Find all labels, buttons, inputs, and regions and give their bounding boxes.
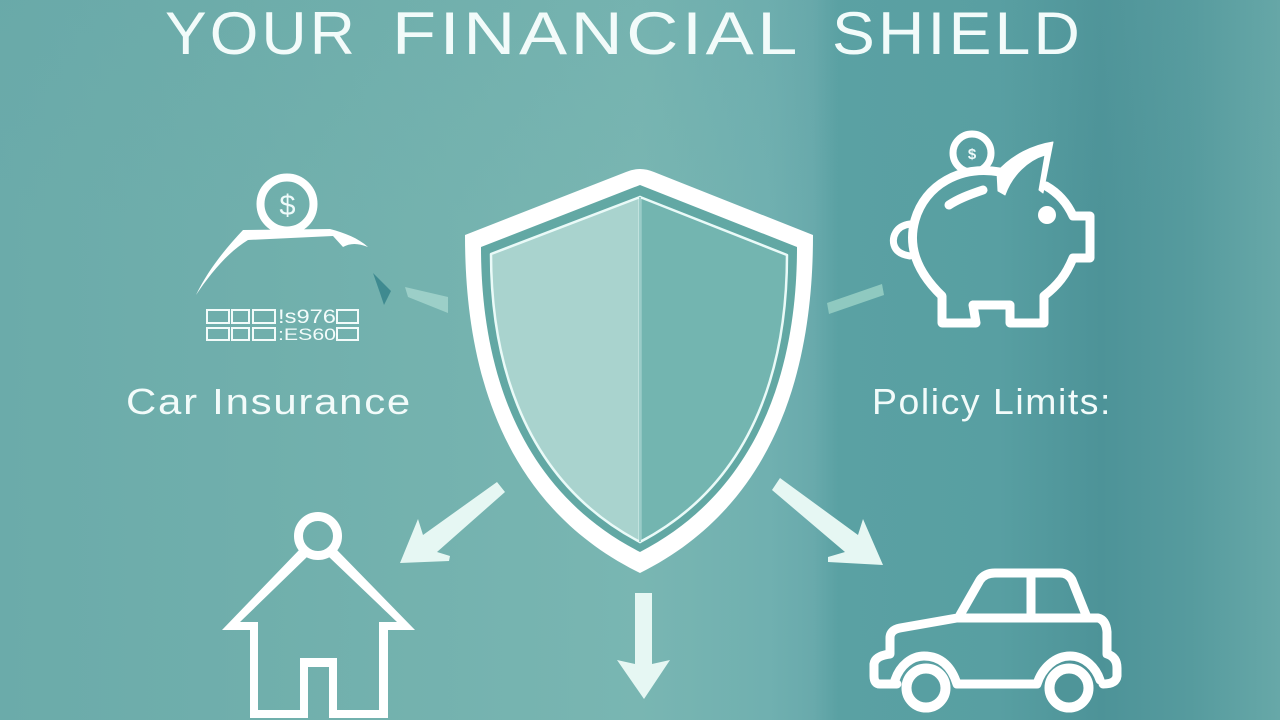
car front wheel (906, 668, 946, 708)
icon: coin and wallet: :ES60 (278, 325, 336, 344)
icon: car (874, 573, 1117, 708)
car window pillar (1026, 574, 1036, 616)
connector: right dash (827, 284, 884, 314)
house outline (222, 549, 415, 718)
shield light left half (491, 197, 640, 542)
arrow: downward (617, 593, 670, 699)
shield darker right half (640, 197, 787, 542)
piggy coin (953, 134, 991, 172)
icon: central shield (465, 169, 813, 573)
shield inner band (481, 185, 797, 552)
piggy body (912, 171, 1090, 323)
title: FINANCIAL (392, 0, 801, 67)
piggy eye (1038, 206, 1056, 224)
connector: left dash (405, 287, 448, 313)
arrow: to house (400, 482, 505, 563)
wallet shadow mark (373, 273, 391, 305)
car rear wheel (1050, 668, 1088, 708)
shield outer rim (465, 169, 813, 573)
wallet outline (196, 229, 368, 295)
car body (874, 618, 1117, 684)
title (165, 0, 1083, 67)
car cabin (960, 573, 1086, 615)
dollar sign: $ (279, 190, 296, 222)
piggy coin symbol: $ (968, 146, 977, 163)
arrow: to car (772, 478, 883, 565)
icon: coin and wallet: !s976 (278, 307, 336, 328)
house top circle (298, 516, 338, 556)
icon: coin and wallet (196, 178, 391, 344)
piggy highlight (949, 190, 983, 205)
icon: piggy bank (893, 134, 1090, 323)
title: SHIELD (832, 0, 1083, 67)
icon: house (222, 516, 415, 718)
garbled code text (207, 310, 358, 340)
label: Policy Limits: Policy Limits: (872, 381, 1112, 422)
piggy ear (997, 142, 1053, 195)
label: Car Insurance: Car Insurance (126, 381, 412, 422)
piggy tail (893, 224, 910, 256)
coin (260, 178, 314, 230)
title: YOUR (165, 0, 358, 67)
